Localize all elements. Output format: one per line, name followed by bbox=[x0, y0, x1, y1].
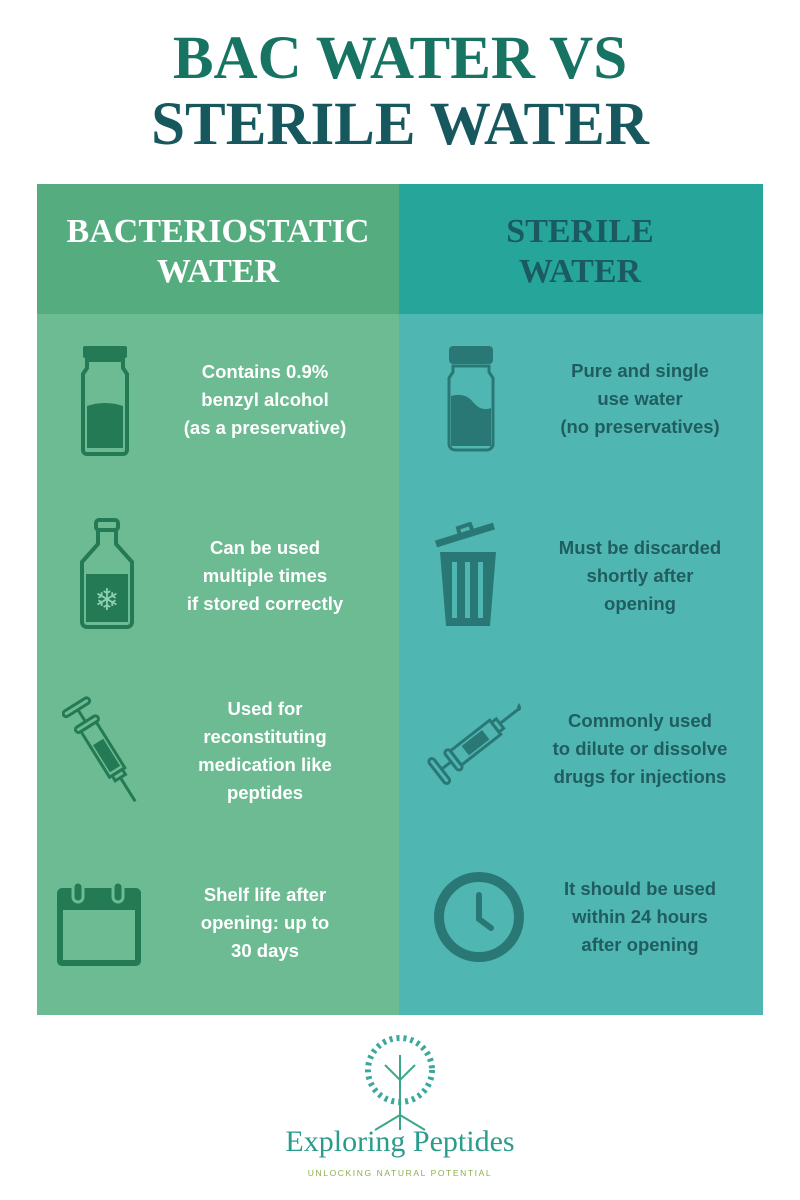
text: reconstituting: peptides bbox=[227, 782, 303, 803]
text: multiple times: if stored correctly bbox=[187, 593, 343, 614]
text: benzyl: benzyl alcohol bbox=[201, 389, 329, 410]
text: pure: (no preservatives) bbox=[560, 416, 720, 437]
icon: calendar bbox=[57, 884, 141, 966]
icon: syringe left bbox=[62, 696, 136, 802]
text: 24 hours bbox=[564, 878, 716, 955]
text: benzyl: Contains 0.9% bbox=[202, 361, 328, 382]
text: multiple times: Can be used bbox=[210, 537, 320, 558]
text: reconstituting: medication like bbox=[198, 754, 332, 775]
heading: bacteriostatic: WATER bbox=[157, 253, 279, 290]
title: BAC WATER VS bbox=[173, 25, 627, 92]
icon: clock bbox=[434, 872, 524, 962]
panel: bacteriostatic bbox=[37, 184, 399, 1015]
text: reconstituting bbox=[198, 698, 332, 803]
text: shelf life: opening: up to bbox=[201, 912, 329, 933]
icon: bottle snowflake bbox=[80, 518, 134, 629]
icon: vial left bbox=[81, 346, 129, 456]
text: shelf life bbox=[201, 884, 329, 961]
text: discarded: shortly after bbox=[587, 565, 693, 586]
text: pure: Pure and single bbox=[571, 360, 709, 381]
text: 24 hours: It should be used bbox=[564, 878, 716, 899]
icon: bottle snowflake: ❄ bbox=[94, 584, 120, 617]
tagline: UNLOCKING NATURAL POTENTIAL bbox=[308, 1168, 492, 1178]
text: dilute: drugs for injections bbox=[554, 766, 726, 787]
logo bbox=[285, 1035, 515, 1178]
text: discarded: opening bbox=[604, 593, 676, 614]
text: benzyl: (as a preservative) bbox=[184, 417, 346, 438]
heading: sterile: WATER bbox=[519, 253, 641, 290]
text: pure: use water bbox=[597, 388, 683, 409]
text: pure bbox=[560, 360, 720, 437]
title: STERILE WATER bbox=[151, 91, 649, 158]
panel: sterile bbox=[399, 184, 763, 1015]
heading: bacteriostatic bbox=[67, 213, 369, 290]
text: dilute: to dilute or dissolve bbox=[553, 738, 727, 759]
logo text: Exploring Peptides bbox=[285, 1125, 515, 1158]
text: reconstituting: reconstituting bbox=[203, 726, 327, 747]
icon: trash bbox=[435, 522, 496, 626]
title bbox=[151, 25, 650, 158]
text: dilute: Commonly used bbox=[568, 710, 712, 731]
text: 24 hours: after opening bbox=[581, 934, 699, 955]
icon: vial right bbox=[448, 346, 494, 452]
heading: sterile: STERILE bbox=[506, 213, 654, 250]
text: shelf life: 30 days bbox=[231, 940, 299, 961]
text: shelf life: Shelf life after bbox=[204, 884, 326, 905]
text: benzyl bbox=[184, 361, 346, 438]
icon: syringe right bbox=[427, 703, 522, 785]
text: discarded: Must be discarded bbox=[559, 537, 721, 558]
text: dilute bbox=[552, 710, 727, 787]
text: multiple times: multiple times bbox=[203, 565, 327, 586]
text: multiple times bbox=[187, 537, 343, 614]
text: discarded bbox=[559, 537, 721, 614]
text: reconstituting: Used for bbox=[227, 698, 303, 719]
text: 24 hours: within 24 hours bbox=[572, 906, 708, 927]
icon: tree bbox=[365, 1035, 435, 1131]
heading: bacteriostatic: BACTERIOSTATIC bbox=[67, 213, 369, 250]
heading: sterile bbox=[506, 213, 654, 290]
